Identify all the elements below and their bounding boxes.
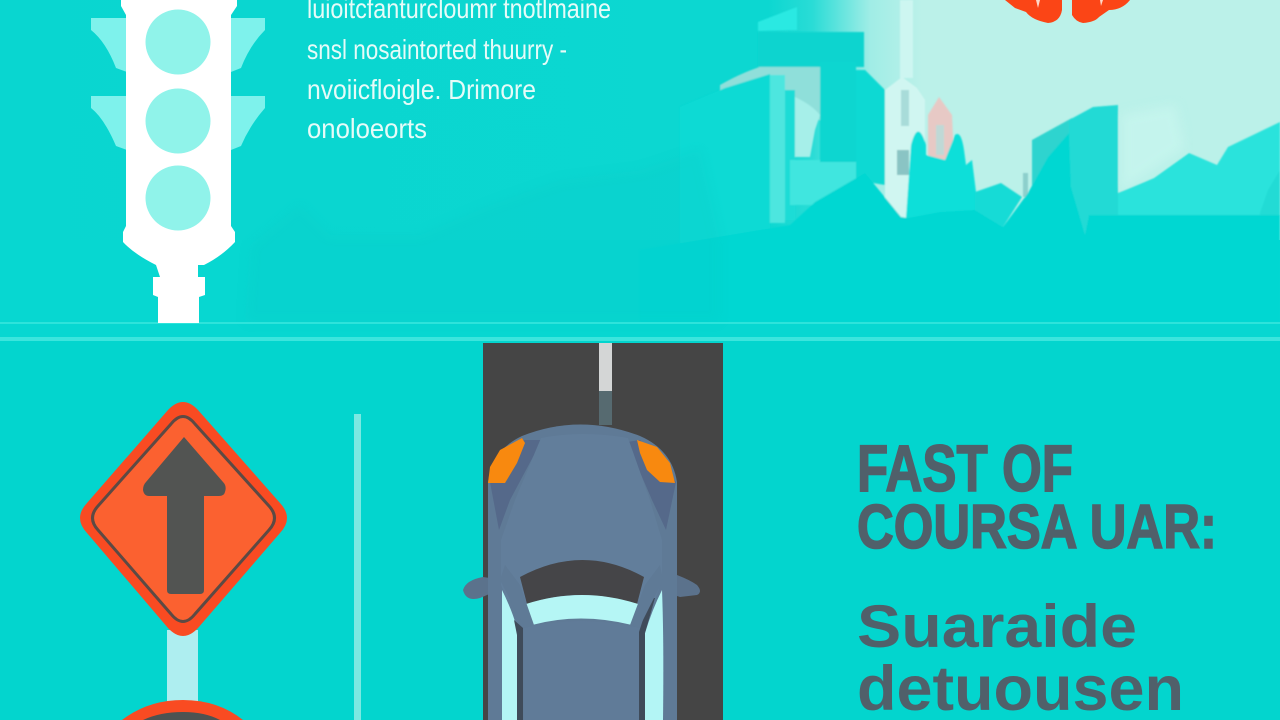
icon: brain-like orange shape — [1005, 0, 1130, 23]
heading: fast of course: FAST OF — [857, 431, 1073, 505]
icon: road signs — [80, 402, 287, 720]
headlights — [488, 438, 525, 483]
city skyline — [640, 0, 1280, 322]
lamps — [146, 10, 210, 74]
diamond sign — [80, 402, 287, 636]
heading: fast of course — [857, 431, 1217, 562]
windshield — [526, 595, 638, 625]
sign pole — [167, 630, 198, 702]
text block: top paragraph: nvoiicfloigle. Drimore — [307, 74, 536, 105]
body — [488, 424, 677, 720]
housing and pole — [121, 0, 237, 323]
sky — [0, 0, 1280, 300]
ground strip — [0, 240, 1280, 340]
arrow — [143, 437, 226, 594]
door pillars — [514, 620, 523, 720]
hood — [501, 434, 662, 600]
visor wings — [91, 18, 127, 72]
road edge lines — [0, 322, 1280, 324]
hood side shading — [490, 440, 542, 530]
icon: traffic light — [91, 0, 265, 323]
side windows — [502, 590, 517, 720]
text block: subheading: Suaraide — [857, 593, 1137, 660]
panel: top city scene — [0, 0, 1280, 341]
mirrors — [463, 577, 505, 599]
text block: subheading — [857, 593, 1184, 720]
icon: car top view — [463, 424, 700, 720]
roof — [524, 621, 639, 720]
lane marking — [599, 343, 612, 391]
lower round sign — [122, 700, 243, 720]
text block: top paragraph: onoloeorts — [307, 113, 427, 144]
faint far-left hills — [245, 150, 720, 322]
divider line — [354, 414, 361, 720]
windshield recess — [520, 560, 644, 604]
A-pillars — [500, 565, 534, 628]
text block: top paragraph — [307, 0, 611, 144]
text block: top paragraph: snsl nosaintorted thuurry - — [307, 34, 567, 65]
road — [483, 343, 723, 720]
